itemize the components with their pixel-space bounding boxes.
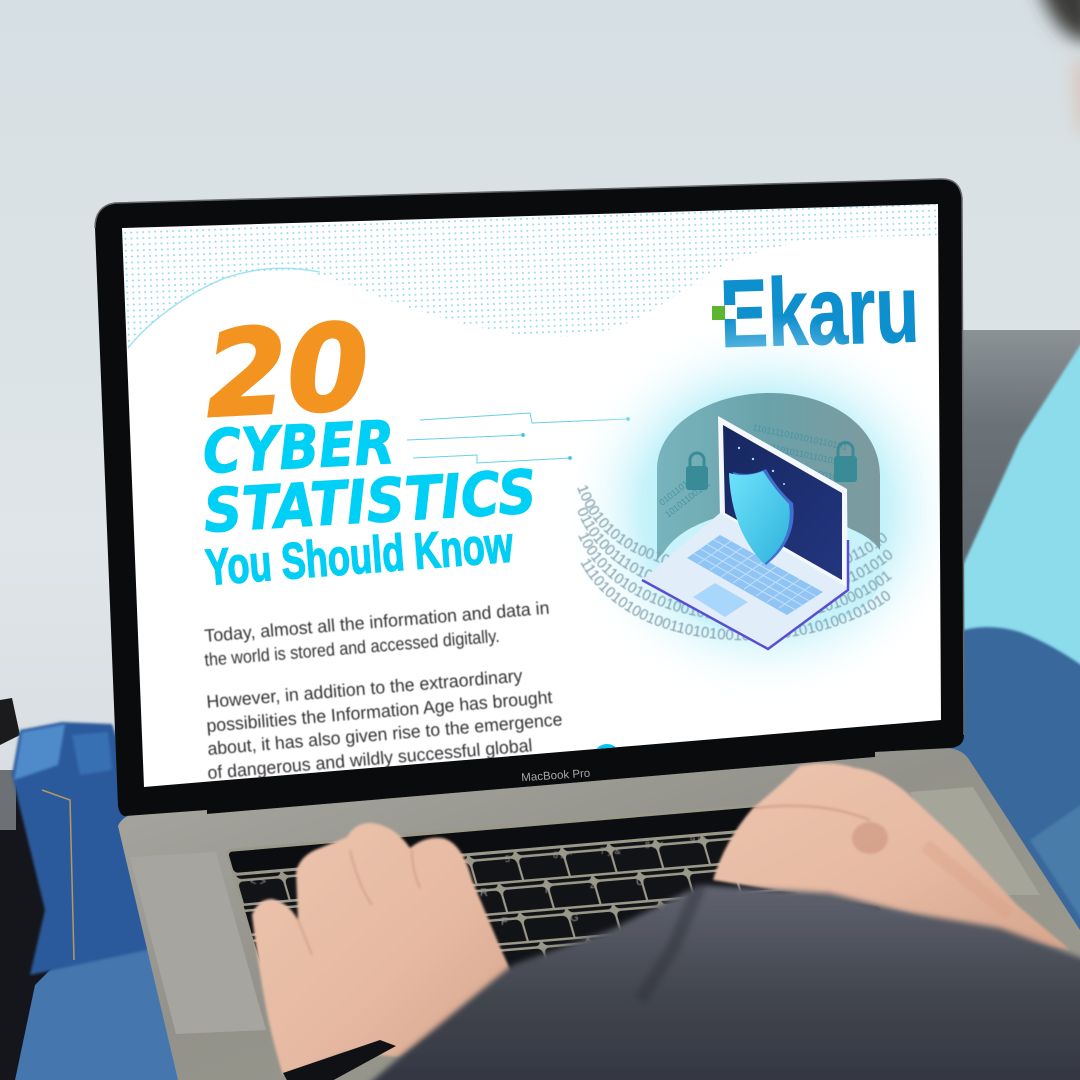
- sofa and cushion, right: [955, 322, 1080, 680]
- binary rings: 1000101010100101010010101101010101001011010100101010: [577, 484, 888, 564]
- lid rim highlight: [95, 179, 964, 735]
- left speaker grille: [130, 852, 266, 1034]
- heading: You Should Know: You Should Know: [203, 515, 515, 596]
- screen: infographic: [122, 204, 941, 787]
- intro paragraph: However, in addition to the extraordinary: [206, 666, 523, 712]
- intro paragraph: of dangerous and wildly successful global: [207, 735, 533, 783]
- touch bar: [228, 799, 854, 873]
- padlock icons on wall: [686, 441, 857, 490]
- key legends: T: [543, 884, 550, 896]
- key legends: Z: [590, 879, 597, 891]
- watch band: [283, 1040, 396, 1080]
- binary on wall: 1010101011011010110: [755, 439, 848, 468]
- key legends: 5: [505, 854, 510, 864]
- heading: 20: 20: [202, 298, 372, 444]
- key legends: G: [570, 912, 579, 924]
- binary rings: 1001011010101010010110100101101001010001001011010010: [578, 532, 892, 619]
- key legends: 6 ž ^: [553, 850, 573, 860]
- sleeve of dark sweater, foreground: [350, 885, 1080, 1080]
- laptop lid: [718, 416, 848, 592]
- intro paragraph: [204, 598, 563, 783]
- key legends: < >: [250, 876, 266, 888]
- laptop base, silver deck: [118, 748, 1080, 1080]
- shield: [729, 469, 794, 565]
- cylinder wall: [657, 393, 880, 560]
- right speaker grille: [910, 787, 1040, 895]
- dotted wave header: [122, 204, 938, 352]
- key legends: 7 ý &: [600, 846, 621, 856]
- head of the person, blurred, top right: [1035, 0, 1080, 135]
- binary on wall: 01011010010: [657, 466, 706, 508]
- binary on wall: 1010101101011001010: [755, 455, 848, 484]
- heading: STATISTICS: STATISTICS: [202, 457, 538, 547]
- binary rings: 1110101010010011010100101001010101001010100010100101: [580, 558, 890, 641]
- binary rings: 0110100111010100101101001010010110101010101010010101: [577, 507, 892, 584]
- intro paragraph: possibilities the Information Age has brought: [206, 687, 553, 736]
- MacBook Pro label: MacBook Pro: [521, 768, 591, 784]
- heading: CYBER: CYBER: [201, 408, 397, 488]
- right jeans leg: [940, 627, 1080, 980]
- intro paragraph: the world is stored and accessed digitally.: [204, 626, 500, 670]
- key legends: F: [501, 916, 508, 928]
- illustration: laptop with shield: [577, 318, 940, 676]
- trackpad: [693, 583, 748, 617]
- binary rings: [577, 484, 892, 641]
- binary on wall: 11011110101010110101: [752, 422, 848, 452]
- logo: Ekaru: Ekaru: [719, 255, 921, 368]
- intro paragraph: Today, almost all the information and data in: [204, 598, 550, 646]
- key legends: 9 í (: [690, 835, 706, 845]
- intro paragraph: about, it has also given rise to the emergence: [207, 709, 563, 759]
- keyboard rows: [235, 823, 898, 1024]
- laptop lid bezel: [95, 179, 964, 816]
- cyan circle at bottom of screen: [596, 744, 616, 749]
- circuit lines: [407, 413, 630, 463]
- binary on wall: 10101100101: [663, 478, 712, 520]
- logo: Ekaru: [712, 275, 916, 348]
- left hand: [252, 823, 515, 1075]
- left leg, shoe and dark clothing: [0, 698, 240, 1080]
- keyboard: [225, 796, 902, 1027]
- wave edge line: [128, 268, 320, 348]
- right hand: [713, 763, 1070, 950]
- laptop base: [642, 513, 848, 648]
- key legends: [250, 835, 706, 928]
- key legends: U: [636, 876, 644, 888]
- laptop keys: [687, 535, 823, 615]
- binary on wall: [657, 422, 848, 520]
- key legends: R: [480, 887, 488, 899]
- key legends: 8 á *: [645, 840, 664, 850]
- screen stars: [738, 447, 785, 485]
- floor disc: [664, 518, 882, 632]
